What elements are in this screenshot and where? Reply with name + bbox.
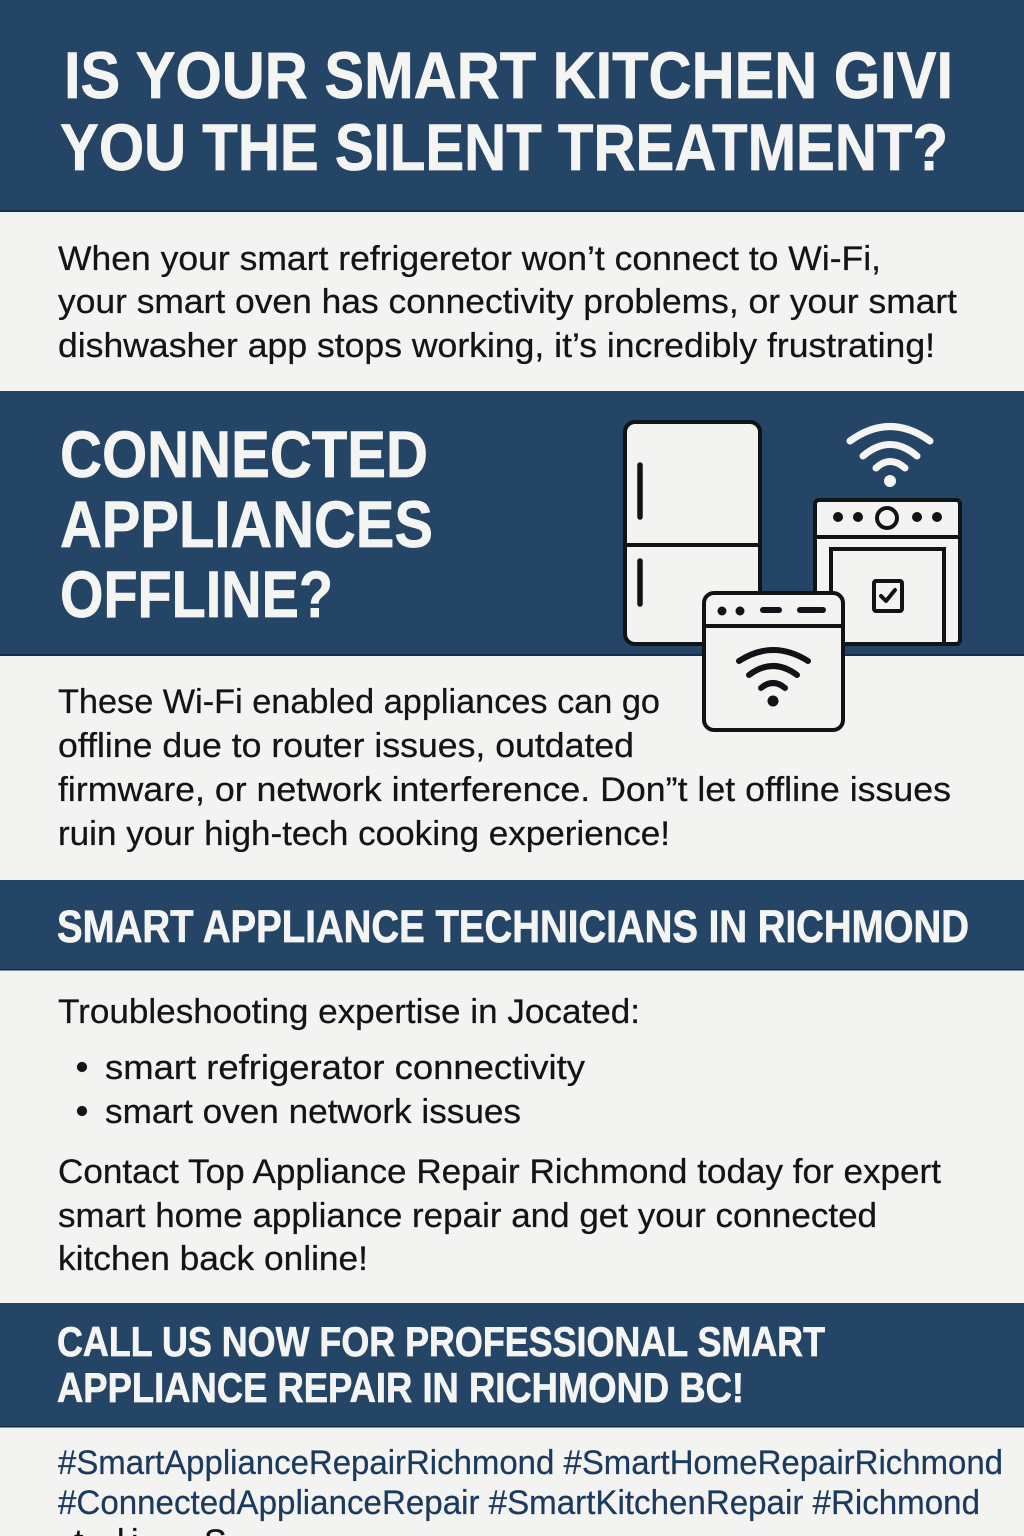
intro paragraph: your smart oven has connectivity problems, or your smart	[58, 283, 958, 321]
title text	[60, 38, 953, 184]
text: troubleshooting intro: Troubleshooting expertise in Jocated:	[58, 993, 640, 1031]
icon: smart oven	[815, 500, 960, 644]
icon: smart refrigerator	[625, 422, 760, 644]
hashtags	[58, 1444, 1003, 1536]
call to action text: CALL US NOW FOR PROFESSIONAL SMART	[57, 1318, 825, 1365]
heading: connected appliances offline: CONNECTED	[60, 417, 428, 491]
paragraph: contact	[58, 1153, 942, 1278]
heading: connected appliances offline: APPLIANCES	[60, 487, 433, 561]
bullet list: smart oven network issues	[105, 1093, 521, 1131]
heading: connected appliances offline	[60, 417, 433, 631]
icon: wifi signal above oven	[850, 426, 930, 487]
paragraph: contact: kitchen back online!	[58, 1240, 368, 1278]
paragraph: why appliances go offline: ruin your high-tech cooking experience!	[58, 815, 670, 853]
bullet list: smart refrigerator connectivity	[105, 1049, 585, 1087]
title banner	[0, 0, 1024, 212]
banner: smart appliance technicians	[0, 880, 1024, 970]
call to action text	[57, 1318, 825, 1411]
title text: IS YOUR SMART KITCHEN GIVI	[64, 38, 953, 112]
paragraph: why appliances go offline: These Wi-Fi enabled appliances can go	[58, 683, 660, 721]
call to action text: APPLIANCE REPAIR IN RICHMOND BC!	[57, 1364, 744, 1411]
paragraph: why appliances go offline: offline due to router issues, outdated	[58, 727, 634, 765]
heading: connected appliances offline: OFFLINE?	[60, 557, 333, 631]
hashtags: #ConnectedApplianceRepair #SmartKitchenRepair #Richmond	[58, 1484, 980, 1522]
intro paragraph: dishwasher app stops working, it’s incredibly frustrating!	[58, 327, 935, 365]
icon: smart dishwasher with wifi	[704, 593, 843, 730]
paragraph: contact: Contact Top Appliance Repair Richmond today for expert	[58, 1153, 942, 1191]
paragraph: why appliances go offline: firmware, or network interference. Don”t let offline issues	[58, 771, 951, 809]
panel: connected appliances offline	[0, 391, 1024, 656]
bullet list	[77, 1049, 585, 1131]
hashtags: #SmartApplianceRepairRichmond #SmartHomeRepairRichmond	[58, 1444, 1003, 1482]
intro paragraph	[58, 240, 958, 365]
call to action banner	[0, 1303, 1024, 1428]
paragraph: contact: smart home appliance repair and get your connected	[58, 1197, 877, 1235]
paragraph: why appliances go offline	[58, 683, 951, 853]
intro paragraph: When your smart refrigeretor won’t connect to Wi-Fi,	[58, 240, 881, 278]
